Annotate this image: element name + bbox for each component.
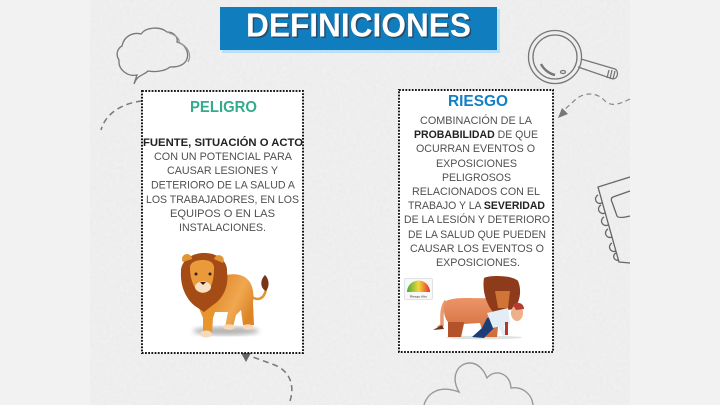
icon: risk gauge bbox=[404, 278, 432, 300]
icon: risk gauge: Riesgo Alto bbox=[410, 294, 427, 298]
text block: riesgo definition: EXPOSICIONES. bbox=[436, 257, 520, 269]
title banner: DEFINICIONES bbox=[248, 8, 472, 45]
text block: riesgo definition: EXPOSICIONES bbox=[436, 158, 517, 170]
text block: peligro definition: LOS TRABAJADORES, EN LOS bbox=[146, 194, 299, 206]
icon: speech cloud bbox=[117, 28, 190, 84]
text block: riesgo definition: OCURRAN EVENTOS O bbox=[416, 143, 535, 155]
text block: riesgo definition: CAUSAR LOS EVENTOS O bbox=[410, 243, 544, 255]
text block: peligro definition: EQUIPOS O EN LAS bbox=[170, 208, 275, 220]
text block: riesgo definition: DE LA LESIÓN Y DETERIORO bbox=[404, 213, 550, 226]
panel: riesgo bbox=[399, 90, 553, 352]
icon: notebook bbox=[596, 177, 630, 263]
text block: peligro definition: FUENTE, SITUACIÓN O ACTO bbox=[143, 136, 303, 149]
panel: peligro bbox=[142, 91, 303, 353]
text block: peligro definition: INSTALACIONES. bbox=[179, 222, 266, 234]
arrow: dashed below peligro panel bbox=[241, 353, 292, 401]
icon: lion bbox=[181, 253, 269, 338]
text block: riesgo definition bbox=[404, 114, 550, 269]
text block: peligro definition: CON UN POTENCIAL PARA bbox=[154, 151, 293, 163]
arrow: dashed right of riesgo panel bbox=[558, 94, 630, 118]
text block: peligro definition: DETERIORO DE LA SALUD A bbox=[151, 180, 296, 192]
heading: riesgo: RIESGO bbox=[448, 93, 508, 110]
icon: lion attacking man bbox=[433, 276, 524, 339]
text block: riesgo definition: PELIGROSOS bbox=[442, 172, 511, 184]
title banner bbox=[220, 6, 500, 53]
text block: riesgo definition: DE LA SALUD QUE PUEDEN bbox=[408, 229, 546, 241]
text block: riesgo definition: COMBINACIÓN DE LA bbox=[420, 114, 533, 127]
text block: riesgo definition: PROBABILIDAD DE QUE bbox=[414, 129, 538, 141]
text block: peligro definition bbox=[143, 136, 303, 234]
arrow: dashed left of peligro panel bbox=[101, 101, 142, 130]
text block: riesgo definition: TRABAJO Y LA SEVERIDAD bbox=[408, 200, 545, 212]
text block: riesgo definition: RELACIONADOS CON EL bbox=[412, 186, 540, 198]
title banner: DEFINICIONES bbox=[246, 6, 471, 44]
icon: bottom cloud bbox=[424, 363, 533, 405]
icon: magnifying glass bbox=[528, 30, 617, 84]
heading: peligro: PELIGRO bbox=[190, 99, 257, 116]
text block: peligro definition: CAUSAR LESIONES Y bbox=[167, 165, 279, 177]
